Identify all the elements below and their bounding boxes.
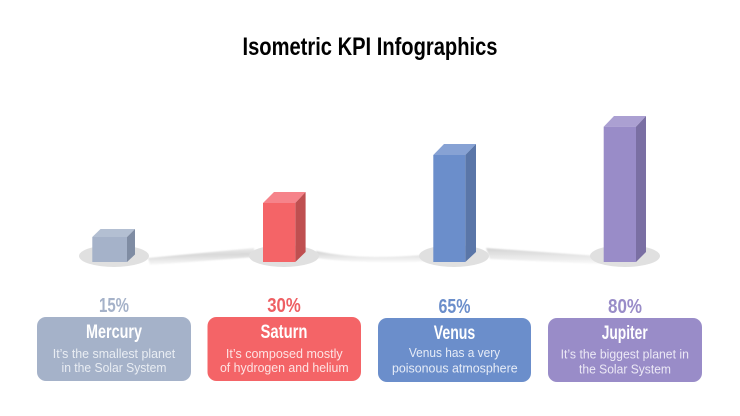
card text: Jupiter: the Solar System	[579, 362, 671, 376]
card text: Mercury: in the Solar System	[62, 361, 166, 375]
card heading: Saturn: Saturn	[260, 322, 308, 343]
bar: Mercury 15%	[79, 229, 149, 267]
card heading: Jupiter: Jupiter	[602, 323, 648, 344]
bar: Venus 65%	[419, 144, 489, 267]
card text: Saturn: It’s composed mostly	[226, 347, 343, 361]
card text: Venus	[392, 346, 518, 376]
card text: Jupiter	[561, 348, 689, 376]
bar: Jupiter 80%	[590, 116, 660, 267]
card text: Venus: Venus has a very	[409, 346, 501, 360]
percentage: 65%: 65%	[438, 296, 471, 318]
card text: Jupiter: It’s the biggest planet in	[561, 348, 689, 362]
card text: Saturn	[220, 347, 349, 375]
card text: Mercury	[53, 347, 176, 375]
title: Isometric KPI Infographics	[242, 33, 498, 61]
card text: Saturn: of hydrogen and helium	[220, 361, 349, 375]
card: Jupiter	[548, 318, 702, 382]
card heading: Venus: Venus	[434, 323, 475, 344]
card: Venus	[378, 318, 531, 382]
card text: Venus: poisonous atmosphere	[392, 362, 518, 376]
card: Saturn	[208, 317, 361, 381]
percentage: 15%: 15%	[99, 295, 129, 317]
percentage: 80%: 80%	[608, 296, 642, 318]
percentage: 30%: 30%	[267, 295, 301, 317]
card: Mercury	[37, 317, 191, 381]
bar: Saturn 30%	[249, 192, 319, 267]
card heading: Mercury: Mercury	[86, 322, 142, 343]
card text: Mercury: It’s the smallest planet	[53, 347, 176, 361]
connecting floor shadow	[148, 248, 600, 265]
